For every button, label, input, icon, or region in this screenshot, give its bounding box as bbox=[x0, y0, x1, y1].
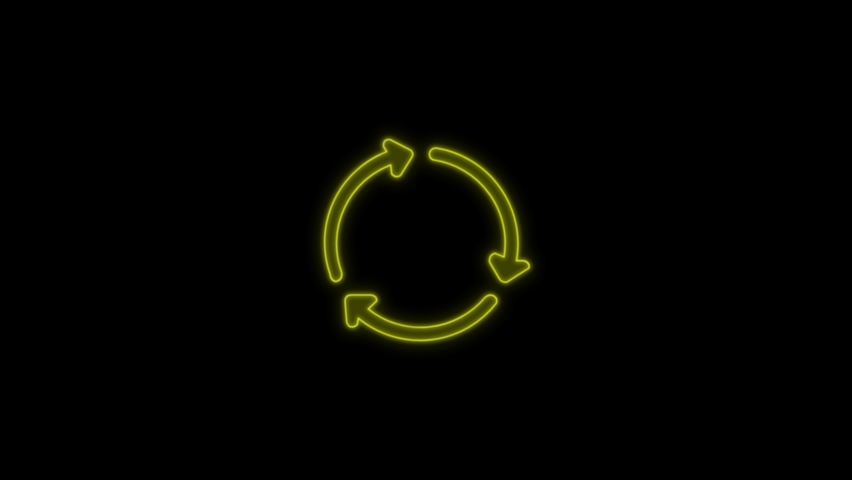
arrow: right arc pointing down bbox=[429, 148, 529, 282]
arrow: bottom arc pointing to upper left bbox=[345, 295, 497, 340]
arrow: left arc pointing to top right bbox=[325, 139, 413, 282]
wide outer glow bbox=[325, 139, 529, 340]
